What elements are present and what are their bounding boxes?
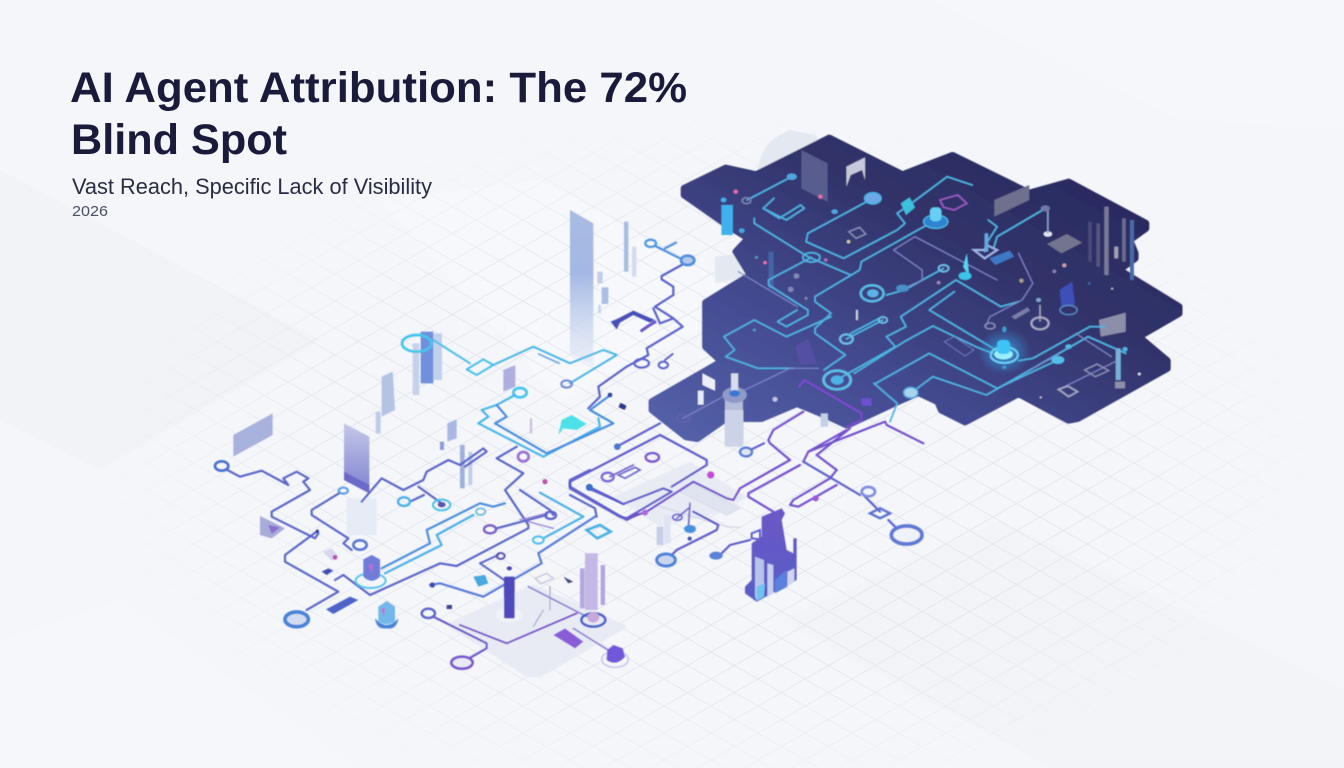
icon: cylinders and chips on panel [677, 195, 1127, 422]
panel: dark opaque network region [652, 130, 1179, 447]
icon: isometric city bars [745, 508, 797, 602]
title: AI Agent Attribution: The 72% [70, 64, 687, 112]
indigo traces [227, 447, 673, 662]
icon: cylinder towers [316, 479, 625, 663]
panel: upper-left network [233, 210, 694, 493]
glass towers [233, 210, 636, 493]
year: 2026 [72, 203, 108, 220]
ring nodes [602, 448, 922, 566]
shadow shapes behind panel [715, 130, 833, 283]
pale platform [450, 587, 623, 675]
panel: central and right network [570, 393, 923, 602]
nodes on panel [742, 173, 1072, 398]
dark hexagonal silhouette [652, 138, 1179, 438]
pale plate and keyboard [613, 410, 828, 545]
cyan traces [683, 177, 1126, 427]
upper right purple trace [588, 240, 694, 410]
subtitle: Vast Reach, Specific Lack of Visibility [72, 174, 432, 199]
background [182, 175, 1212, 746]
title: Blind Spot [71, 116, 287, 164]
cyan trace with ring [402, 335, 617, 457]
title [70, 64, 687, 164]
pale glass blocks [260, 498, 377, 538]
glass slabs on panel [725, 150, 1134, 447]
icon: dark bracket [611, 311, 655, 329]
ring nodes [215, 452, 628, 669]
icon: glowing hub node [977, 326, 1031, 375]
icon: small nodes and chips [586, 393, 819, 560]
decorative data points [734, 190, 1141, 402]
panel: lower-left network [215, 447, 673, 675]
purple traces [570, 412, 923, 557]
icon: cyan chip [558, 415, 587, 435]
